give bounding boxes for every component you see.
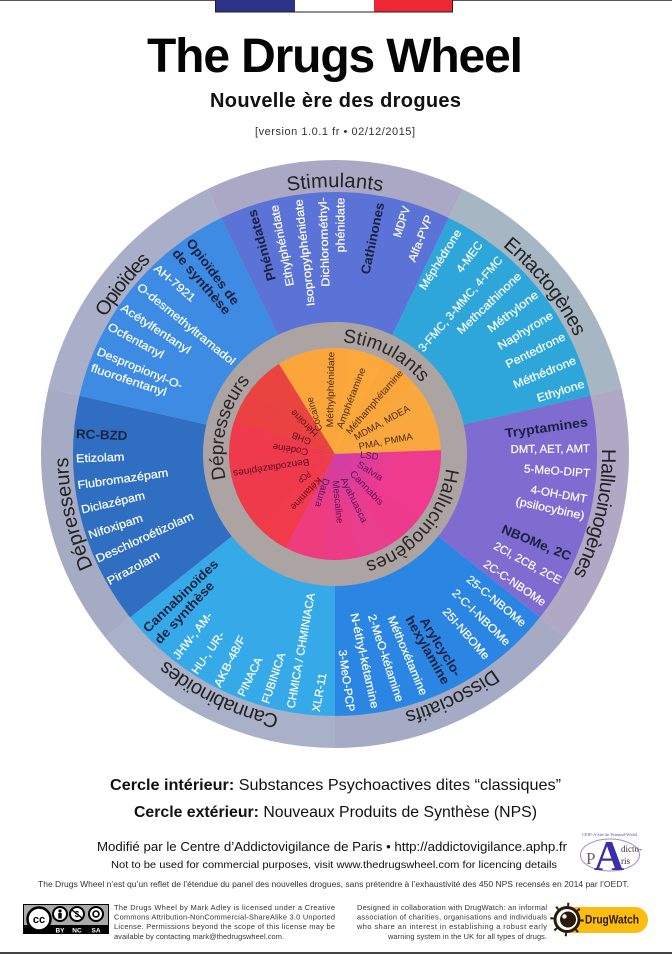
- text block: DrugWatch collaboration: Designed in collaboration with DrugWatch: an informal: [357, 903, 547, 912]
- drug list: classic depressants: Codéine: [272, 441, 309, 457]
- inner ring label: Hallucinogènes: Hallucinogènes: [366, 470, 459, 570]
- drug list: classic stimulants: Méthamphétamine: [344, 368, 406, 437]
- sector wedge: Opioïdes NPS: [59, 202, 406, 543]
- drug list: Cannabinoïdes NPS: XLR-11: [311, 672, 329, 713]
- credit line: Modifié par le Centre d’Addictovigilance de Paris • http://addictovigilance.aphp.fr: [97, 840, 567, 854]
- version line: [version 1.0.1 fr • 02/12/2015]: [255, 126, 415, 138]
- drug list: Dissociatifs NPS: [336, 574, 528, 713]
- drug list: Cannabinoïdes NPS: de synthèse: [151, 578, 217, 647]
- text block: DrugWatch collaboration: who share an interest in establishing a robust early: [356, 922, 547, 931]
- text block: DrugWatch collaboration: association of charities, organisations and individuals: [357, 912, 547, 922]
- drug list: classic hallucinogens: Cannabis: [347, 469, 386, 508]
- drug list: Hallucinogènes NPS: DMT, AET, AMT: [511, 443, 590, 456]
- drug list: Entactogènes NPS: Methcathinone: [455, 271, 524, 337]
- text block: Creative Commons licence: The Drugs Wheel by Mark Adley is licensed under a Creative: [114, 903, 335, 912]
- drug list: Hallucinogènes NPS: [481, 414, 590, 609]
- drug list: classic stimulants: MDMA, MDEA: [352, 403, 413, 443]
- drug list: classic hallucinogens: Salvia: [355, 459, 385, 484]
- drug list: Stimulants NPS: [244, 197, 436, 307]
- caption: outer circle: Cercle extérieur: Nouveaux Produits de Synthèse (NPS): [134, 804, 537, 821]
- logo: Centre d'Addictovigilance de Paris: ris: [621, 856, 630, 866]
- sector wedge: Hallucinogènes NPS: [310, 343, 616, 623]
- drug list: Entactogènes NPS: 3-FMC, 3-MMC, 4-FMC: [417, 254, 505, 355]
- drug list: Dissociatifs NPS: 2-MeO-kétamine: [365, 613, 405, 704]
- drug list: classic hallucinogens: LSD: [359, 450, 379, 463]
- drug list: Cannabinoïdes NPS: [140, 556, 329, 713]
- logo: Creative Commons BY-NC-SA badge: NC: [72, 928, 82, 934]
- caption: inner circle: Cercle intérieur: Substances Psychoactives dites “classiques”: [110, 777, 561, 794]
- drug list: Dissociatifs NPS: 25-C-NBOMe: [464, 574, 528, 630]
- drug list: Opioïdes NPS: [89, 236, 243, 399]
- flag: French tricolour: [215, 0, 452, 12]
- drug list: classic depressants: [232, 407, 324, 512]
- logo: Creative Commons BY-NC-SA badge: SA: [91, 928, 101, 934]
- drug list: classic stimulants: PMA, PMMA: [358, 431, 414, 453]
- drug list: classic depressants: Héroïne: [288, 407, 321, 439]
- drug list: Hallucinogènes NPS: NBOMe, 2C: [499, 521, 574, 564]
- drug list: Entactogènes NPS: Pentedrone: [504, 331, 568, 371]
- drug list: Opioïdes NPS: de synthèse: [169, 246, 234, 318]
- outer ring: Entactogènes: Entactogènes: [504, 236, 583, 336]
- outer ring: Dépresseurs: Dépresseurs: [58, 458, 92, 571]
- drug list: Dissociatifs NPS: Arylcyclo-: [417, 614, 465, 679]
- drug list: Stimulants NPS: Isopropylphénidate: [293, 199, 318, 307]
- logo: Centre d'Addictovigilance de Paris: CEIP-A Site de Fernand-Widal: [582, 832, 638, 837]
- subtitle: Nouvelle ère des drogues: [210, 90, 461, 112]
- drug list: Dépresseurs NPS: Etizolam: [76, 452, 125, 465]
- drug list: Stimulants NPS: Phénidates: [244, 208, 279, 283]
- inner pie: Hallucinogènes wedges: [285, 436, 443, 561]
- drug list: Stimulants NPS: phénidate: [336, 198, 348, 252]
- inner ring label: Stimulants: Stimulants: [344, 330, 428, 381]
- drug list: Entactogènes NPS: 4-MEC: [454, 240, 486, 275]
- drug list: Opioïdes NPS: O-desmethyltramadol: [134, 281, 237, 368]
- logo: Centre d'Addictovigilance de Paris: P: [586, 849, 595, 868]
- drug list: Cannabinoïdes NPS: HU-, UR-: [190, 630, 228, 677]
- drug list: classic hallucinogens: Datura: [312, 477, 331, 509]
- drug list: classic stimulants: [305, 352, 414, 453]
- drug list: Dissociatifs NPS: 25I-NBOMe: [440, 606, 491, 662]
- drug list: Hallucinogènes NPS: 5-MeO-DIPT: [524, 463, 590, 480]
- outer ring: Stimulants: Stimulants: [288, 172, 383, 191]
- drug list: classic hallucinogens: Ayahuasca: [338, 476, 370, 525]
- text block: Creative Commons licence: Commons Attribution-NonCommercial-ShareAlike 3.0 Unported: [114, 912, 335, 922]
- drug list: Dépresseurs NPS: Deschloroétizolam: [94, 511, 196, 565]
- logo: Centre d'Addictovigilance de Paris: dicto-: [621, 844, 642, 854]
- sector wedge: Dissociatifs NPS: [233, 405, 551, 739]
- drug list: Cannabinoïdes NPS: PINACA: [236, 655, 266, 699]
- outer ring: Entactogènes: [392, 189, 622, 424]
- chart: drugs wheel: [41, 160, 629, 748]
- drug list: Opioïdes NPS: Ocfentanyl: [105, 321, 166, 361]
- drug list: Stimulants NPS: Alfa-PVP: [407, 213, 436, 264]
- drug list: Dépresseurs NPS: Flubromazépam: [77, 467, 169, 492]
- drug list: classic stimulants: Cocaïne: [305, 396, 325, 432]
- drug list: classic hallucinogens: [312, 450, 386, 525]
- logo: DrugWatch: DrugWatch: [585, 914, 639, 926]
- logo: Centre d'Addictovigilance de Paris: A: [594, 834, 625, 880]
- logo: Creative Commons BY-NC-SA badge: BY: [55, 928, 65, 934]
- drug list: Entactogènes NPS: Méthédrone: [512, 355, 578, 392]
- drug list: Opioïdes NPS: Opioïdes de: [183, 236, 243, 308]
- drug list: Stimulants NPS: Dichlorométhyl-: [317, 197, 333, 287]
- drug list: Dépresseurs NPS: Nifoxipam: [87, 513, 145, 542]
- sector wedge: Entactogènes NPS: [264, 202, 611, 543]
- drug list: Cannabinoïdes NPS: AKB-48/F: [212, 634, 249, 689]
- drug list: Entactogènes NPS: Naphyrone: [496, 310, 555, 353]
- drug list: Cannabinoïdes NPS: CHMICA / CHMINIACA: [286, 592, 318, 709]
- inner pie: Stimulants wedges: [278, 347, 443, 472]
- outer ring: Cannabinoïdes: Cannabinoïdes: [161, 662, 277, 728]
- drug list: Stimulants NPS: Cathinones: [358, 201, 387, 276]
- drug list: classic depressants: Kétamine: [288, 475, 324, 512]
- outer ring: Cannabinoïdes: [105, 578, 335, 748]
- outer ring: Dissociatifs: [335, 537, 565, 748]
- drug list: Opioïdes NPS: Despropionyl-O-: [95, 346, 184, 392]
- drug list: Opioïdes NPS: AH-7921: [151, 263, 197, 305]
- drug list: Stimulants NPS: MDPV: [392, 205, 413, 239]
- sector wedge: Dépresseurs NPS: [54, 343, 360, 623]
- drug list: Entactogènes NPS: Ethylone: [535, 379, 586, 405]
- outer ring: Opioïdes: [48, 189, 276, 424]
- drug list: Opioïdes NPS: fluorofentanyl: [89, 363, 168, 399]
- logo: Creative Commons BY-NC-SA badge: [23, 904, 109, 934]
- drug list: Entactogènes NPS: Méphédrone: [418, 228, 464, 292]
- drug list: Dépresseurs NPS: [76, 426, 196, 588]
- inner pie: Dépresseurs wedges: [227, 363, 350, 549]
- drug list: Cannabinoïdes NPS: FUBINICA: [260, 651, 288, 705]
- text block: DrugWatch collaboration: warning system in the UK for all types of drugs.: [387, 932, 547, 941]
- text block: Creative Commons licence: License. Permissions beyond the scope of this license may be: [114, 922, 335, 931]
- text block: Creative Commons licence: [114, 903, 335, 941]
- drug list: classic depressants: GHB: [290, 429, 313, 447]
- text block: DrugWatch collaboration: [356, 903, 547, 941]
- logo: Centre d'Addictovigilance de Paris: [580, 832, 642, 880]
- outer ring: Dissociatifs: Dissociatifs: [406, 670, 500, 723]
- drug list: Dissociatifs NPS: N-éthyl-kétamine: [347, 612, 380, 710]
- drug list: classic hallucinogens: Mescaline: [330, 480, 345, 524]
- text block: Creative Commons licence: available by contacting mark@thedrugswheel.com.: [114, 932, 284, 941]
- drug list: Stimulants NPS: Ethylphénidate: [269, 204, 297, 287]
- drug list: Hallucinogènes NPS: 4-OH-DMT: [530, 484, 588, 506]
- drug list: Hallucinogènes NPS: 2C-C-NBOMe: [481, 558, 548, 609]
- drug list: Cannabinoïdes NPS: Cannabinoïdes: [140, 556, 221, 635]
- drug list: Dissociatifs NPS: hexylamine: [402, 613, 453, 687]
- title: The Drugs Wheel: [147, 30, 523, 83]
- logo: Creative Commons BY-NC-SA badge: $: [75, 910, 80, 919]
- drug list: Dissociatifs NPS: Méthoxétamine: [385, 614, 429, 697]
- inner ring label: Dépresseurs: Dépresseurs: [209, 376, 249, 480]
- outer ring: Hallucinogènes: Hallucinogènes: [574, 450, 616, 578]
- drug list: Dépresseurs NPS: Diclazépam: [80, 490, 146, 516]
- disclaimer: The Drugs Wheel n’est qu’un reflet de l’étendue du panel des nouvelles drogues, sans prétendre à l’exhaustivité des 450 NPS recensés en 2014 par l’OEDT.: [38, 880, 629, 889]
- drug list: Hallucinogènes NPS: 2CI, 2CB, 2CE: [491, 540, 563, 587]
- drug list: Dépresseurs NPS: Pirazolam: [105, 550, 162, 588]
- drug list: Dépresseurs NPS: RC-BZD: [76, 426, 128, 443]
- drug list: Dissociatifs NPS: 3-MeO-PCP: [336, 649, 356, 713]
- drug list: classic depressants: PCP: [295, 468, 312, 485]
- drug list: Cannabinoïdes NPS: JHW-, AM-: [171, 610, 215, 662]
- drug list: classic stimulants: Méthylphénidate: [325, 352, 337, 427]
- logo: Creative Commons BY-NC-SA badge: cc: [33, 914, 45, 926]
- drug list: classic stimulants: Amphétamine: [335, 366, 368, 430]
- sector wedge: Cannabinoïdes NPS: [119, 405, 437, 739]
- inner ring: [203, 322, 467, 586]
- drug list: Dissociatifs NPS: 2-C-I-NBOMe: [449, 587, 512, 649]
- drug list: Hallucinogènes NPS: (psilocybine): [515, 496, 586, 523]
- drug list: Hallucinogènes NPS: Tryptamines: [504, 414, 589, 441]
- drug list: Opioïdes NPS: Acétylfentanyl: [118, 302, 193, 357]
- outer ring: Opioïdes: Opioïdes: [96, 254, 150, 314]
- licensing notice: Not to be used for commercial purposes, visit www.thedrugswheel.com for licencing details: [111, 859, 557, 871]
- outer ring: Dépresseurs: [41, 388, 230, 638]
- logo: DrugWatch: [552, 904, 648, 934]
- drug list: classic depressants: Benzodiazépines: [232, 456, 310, 479]
- drug list: Entactogènes NPS: Méthylone: [486, 289, 541, 335]
- outer ring: Hallucinogènes: [440, 388, 629, 638]
- sector wedge: Stimulants NPS: [221, 192, 449, 454]
- drug list: Entactogènes NPS: [417, 228, 586, 405]
- outer ring: Stimulants: [208, 160, 462, 334]
